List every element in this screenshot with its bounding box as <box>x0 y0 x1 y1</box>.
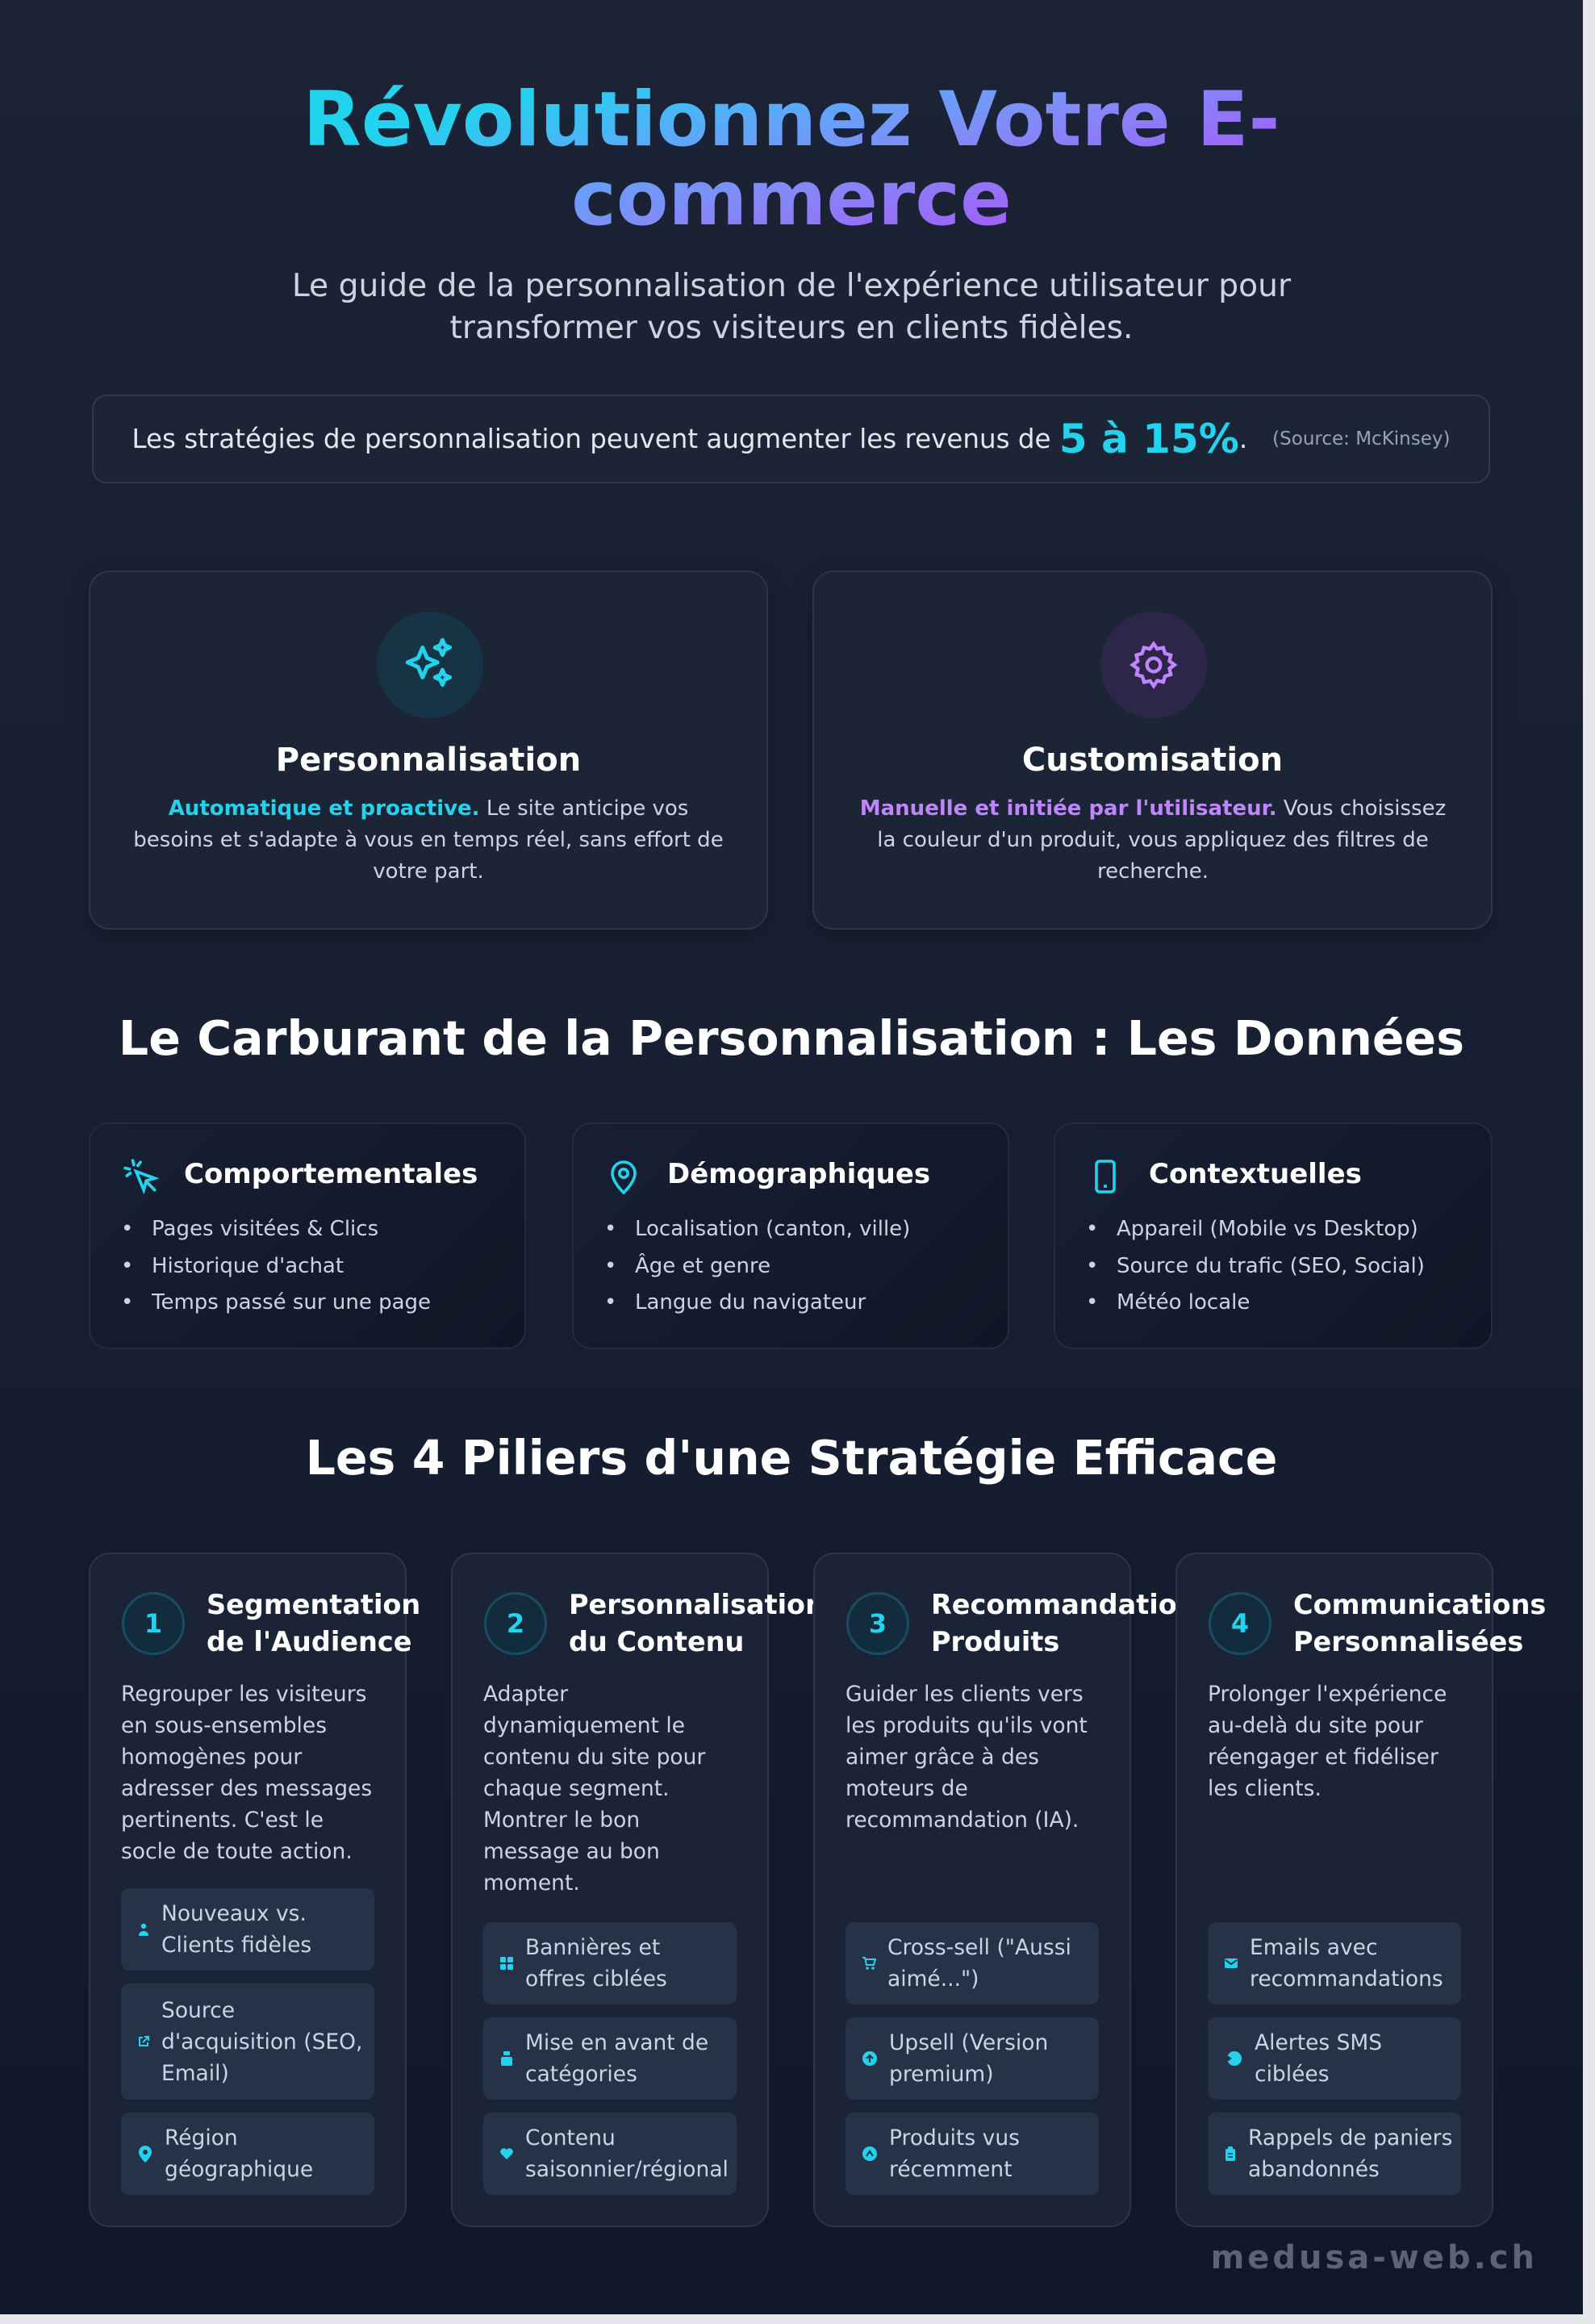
number badge <box>1209 1592 1271 1655</box>
items <box>121 1888 374 2195</box>
heading <box>569 1589 825 1657</box>
pillar 4 <box>1175 1553 1493 2227</box>
section heading: piliers: Les 4 Piliers d'une Stratégie Efficace <box>306 1431 1277 1486</box>
icon: sparkles <box>377 612 483 718</box>
stat callout: (Source: McKinsey) <box>1272 428 1450 449</box>
items: Mise en avant de catégories <box>525 2030 708 2087</box>
items: Bannières et <box>525 1935 660 1960</box>
list: Pages visitées & Clics <box>152 1217 378 1241</box>
items <box>1208 1922 1461 2195</box>
section heading: données: Le Carburant de la Personnalisation : Les Données <box>119 1011 1464 1066</box>
icon: location pin <box>611 1160 637 1194</box>
description: Manuelle et initiée par l'utilisateur. Vous choisissez la couleur d'un produit, vous appliquez des filtres de recherche. <box>860 796 1446 884</box>
items: Nouveaux vs. Clients fidèles <box>161 1901 311 1958</box>
panel: customisation <box>812 571 1493 930</box>
items: offres ciblées <box>525 1967 667 1992</box>
items: Email) <box>161 2061 229 2085</box>
list <box>124 1217 431 1315</box>
number badge <box>484 1592 547 1655</box>
heading: du Contenu <box>569 1626 744 1657</box>
list: Langue du navigateur <box>635 1290 866 1315</box>
list: Localisation (canton, ville) <box>635 1217 910 1241</box>
list: Temps passé sur une page <box>152 1290 431 1315</box>
items: Rappels de paniers abandonnés <box>1248 2125 1452 2182</box>
description: Regrouper les visiteurs en sous-ensembles homogènes pour adresser des messages pertinents. C'est le socle de toute action. <box>121 1682 372 1864</box>
number badge <box>846 1592 909 1655</box>
heading: Customisation <box>1022 742 1283 779</box>
description: Prolonger l'expérience au-delà du site pour réengager et fidéliser les clients. <box>1208 1682 1447 1801</box>
heading: Produits <box>931 1626 1059 1657</box>
items <box>483 1922 737 2195</box>
pillar 3 <box>813 1553 1131 2227</box>
list: Météo locale <box>1117 1290 1250 1315</box>
heading: Recommandations <box>931 1589 1213 1620</box>
items: Contenu saisonnier/régional <box>525 2125 729 2182</box>
list <box>607 1217 910 1315</box>
items: Région géographique <box>165 2125 313 2182</box>
items <box>846 1922 1099 2195</box>
items: Produits vus récemment <box>889 2125 1020 2182</box>
subtitle: transformer vos visiteurs en clients fidèles. <box>450 310 1133 346</box>
list: Source du trafic (SEO, Social) <box>1117 1254 1425 1278</box>
number badge: 4 <box>1231 1608 1249 1639</box>
list: Âge et genre <box>635 1254 770 1278</box>
stat callout: Les stratégies de personnalisation peuvent augmenter les revenus de . <box>132 424 1247 454</box>
panel: démographiques <box>572 1122 1009 1349</box>
heading: Personnalisation <box>276 742 581 779</box>
subtitle <box>292 268 1291 346</box>
description: Guider les clients vers les produits qu'ils vont aimer grâce à des moteurs de recommandation (IA). <box>846 1682 1088 1833</box>
pillar 2 <box>451 1553 769 2227</box>
items: Alertes SMS ciblées <box>1255 2030 1382 2087</box>
list: Appareil (Mobile vs Desktop) <box>1117 1217 1418 1241</box>
heading: Segmentation <box>207 1589 420 1620</box>
heading <box>931 1589 1213 1657</box>
panel: contextuelles <box>1054 1122 1493 1349</box>
subtitle: Le guide de la personnalisation de l'expérience utilisateur pour <box>292 268 1291 304</box>
heading: de l'Audience <box>207 1626 411 1657</box>
heading: Personnalisation <box>569 1589 825 1620</box>
list: Historique d'achat <box>152 1254 344 1278</box>
heading: Démographiques <box>667 1158 930 1190</box>
heading: Personnalisées <box>1293 1626 1523 1657</box>
list <box>1089 1217 1425 1315</box>
stat callout <box>92 395 1490 483</box>
heading <box>207 1589 420 1657</box>
pillar 1 <box>89 1553 407 2227</box>
heading: Contextuelles <box>1149 1158 1362 1190</box>
description: Adapter dynamiquement le contenu du site pour chaque segment. Montrer le bon message au bon moment. <box>483 1682 705 1896</box>
items: d'acquisition (SEO, <box>161 2029 362 2054</box>
description: Automatique et proactive. Le site anticipe vos besoins et s'adapte à vous en temps réel, sans effort de votre part. <box>133 796 724 884</box>
heading: Communications <box>1293 1589 1546 1620</box>
number badge: 1 <box>144 1608 162 1639</box>
items: Source <box>161 1998 235 2022</box>
icon: cursor click <box>123 1159 160 1194</box>
heading: Comportementales <box>184 1158 478 1190</box>
items: Cross-sell ("Aussi aimé...") <box>887 1935 1071 1992</box>
title: Révolutionnez Votre E-commerce <box>303 76 1280 243</box>
panel: personnalisation <box>89 571 768 930</box>
number badge <box>122 1592 185 1655</box>
items: Emails avec recommandations <box>1250 1935 1443 1992</box>
number badge: 2 <box>507 1608 524 1639</box>
panel: comportementales <box>89 1122 526 1349</box>
icon: gear <box>1100 612 1207 718</box>
items: Upsell (Version premium) <box>889 2030 1048 2087</box>
number badge: 3 <box>869 1608 887 1639</box>
heading <box>1293 1589 1546 1657</box>
icon: smartphone <box>1095 1160 1116 1193</box>
stat callout: 5 à 15% <box>1059 416 1239 462</box>
footer: brand: medusa-web.ch <box>1211 2239 1538 2276</box>
